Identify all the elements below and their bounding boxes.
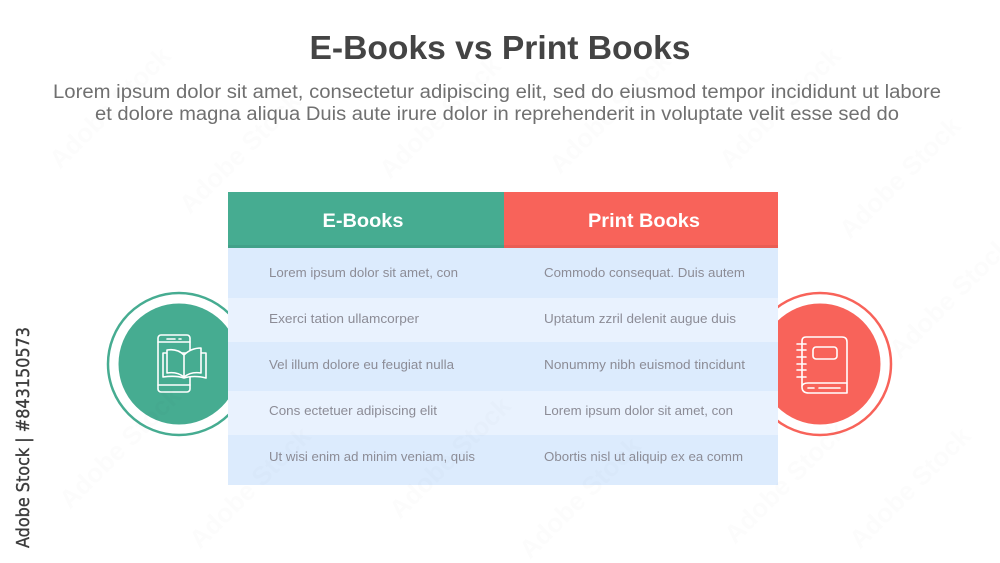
- print books column text: Commodo consequat. Duis autem: [544, 265, 745, 280]
- e-books column text: Lorem ipsum dolor sit amet, con: [269, 265, 458, 280]
- subtitle text: et dolore magna aliqua Duis aute irure dolor in reprehenderit in voluptate velit esse sed do: [95, 104, 899, 125]
- comparison table: [228, 192, 778, 485]
- subtitle text: Lorem ipsum dolor sit amet, consectetur adipiscing elit, sed do eiusmod tempor incididunt ut labore: [53, 82, 941, 103]
- header: print books: [504, 192, 778, 248]
- header: e-books: E-Books: [322, 211, 404, 232]
- e-books column text: Vel illum dolore eu feugiat nulla: [269, 357, 455, 372]
- left circle badge: e-books: [108, 293, 250, 435]
- e-books column text: Ut wisi enim ad minim veniam, quis: [269, 449, 475, 464]
- print books column text: Nonummy nibh euismod tincidunt: [544, 357, 745, 372]
- header: print books: Print Books: [588, 211, 700, 232]
- header: e-books: [228, 192, 504, 248]
- right circle badge: print books: [749, 293, 891, 435]
- stock id vertical label: Adobe Stock | #843150573: [14, 327, 34, 548]
- subtitle text: [53, 82, 941, 125]
- icon: spiral notebook: [797, 337, 847, 393]
- print books column text: [544, 265, 745, 464]
- table rows background: [228, 248, 778, 485]
- print books column text: Lorem ipsum dolor sit amet, con: [544, 403, 733, 418]
- print books column text: Obortis nisl ut aliquip ex ea comm: [544, 449, 743, 464]
- title: E-Books vs Print Books: [310, 29, 690, 66]
- e-books column text: [269, 265, 475, 464]
- icon: phone with open book: [158, 335, 206, 392]
- e-books column text: Exerci tation ullamcorper: [269, 311, 420, 326]
- e-books column text: Cons ectetuer adipiscing elit: [269, 403, 437, 418]
- print books column text: Uptatum zzril delenit augue duis: [544, 311, 737, 326]
